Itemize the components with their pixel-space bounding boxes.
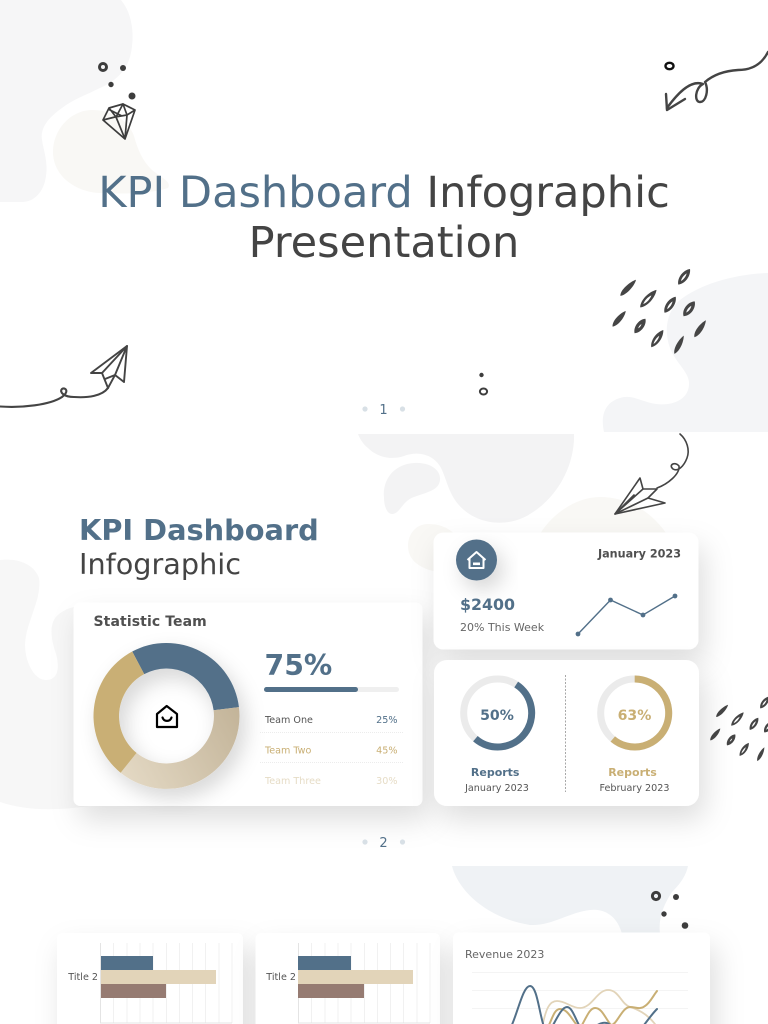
title: Presentation xyxy=(249,218,519,268)
label: February report: Reports xyxy=(608,766,657,779)
background blob: top left grey xyxy=(0,0,133,202)
line chart xyxy=(511,986,657,1024)
icon: diamond xyxy=(103,104,135,139)
icon: home in donut xyxy=(157,706,177,727)
date: January 2023 xyxy=(597,548,681,560)
divider xyxy=(564,675,566,792)
subtext: 20% This Week xyxy=(460,621,545,634)
ring chart: February: 63% xyxy=(618,708,651,724)
axis label: Title 2 xyxy=(67,972,98,983)
ring chart: January xyxy=(464,679,532,747)
icon: looping arrow top right xyxy=(666,52,768,110)
bars xyxy=(298,956,413,998)
grid xyxy=(472,972,688,1008)
grid xyxy=(100,943,232,1023)
page number 1: 1 xyxy=(379,403,388,418)
bars xyxy=(101,956,216,998)
team rows: 25% xyxy=(376,715,398,726)
icon: leaf cluster, slide 2 xyxy=(709,695,768,762)
slide 2 heading: Infographic xyxy=(79,547,241,581)
line chart xyxy=(576,594,677,636)
panel: weekly revenue xyxy=(434,532,698,650)
label: January report xyxy=(464,766,529,794)
page number 2: 2 xyxy=(379,836,388,851)
big percent: 75% xyxy=(264,649,332,682)
panel: bar chart 2 xyxy=(256,933,440,1024)
panel: statistic team xyxy=(74,602,422,806)
grid xyxy=(298,943,430,1023)
team rows: Team Two xyxy=(264,746,312,756)
slide 2 heading: KPI Dashboard xyxy=(79,513,319,547)
label: February report: February 2023 xyxy=(600,783,669,794)
background blob: slide 3 xyxy=(452,866,688,934)
panel: revenue line chart xyxy=(453,932,710,1024)
icon: paper plane with trail, slide 1 xyxy=(0,346,127,407)
background blob: slide 2 left xyxy=(0,560,90,809)
title: KPI Dashboard Infographic xyxy=(98,168,670,218)
team rows: 45% xyxy=(376,746,398,756)
panel: reports xyxy=(434,660,699,806)
label: January report: Reports xyxy=(471,766,520,779)
icon: dots top left xyxy=(100,64,136,100)
progress bar xyxy=(264,687,399,692)
background blob: top left beige xyxy=(53,110,169,193)
ring chart: January: 50% xyxy=(480,708,514,724)
amount: $2400 xyxy=(460,595,515,614)
label: January report: January 2023 xyxy=(464,783,529,794)
team rows: Team One xyxy=(264,715,313,726)
icon: small dots, slide 1 xyxy=(479,373,487,394)
background blob: bottom right of slide 1 xyxy=(603,273,768,432)
icon: home badge xyxy=(456,540,497,580)
team rows xyxy=(260,715,404,787)
label: February report xyxy=(600,766,669,794)
icon: dots, slide 3 xyxy=(652,892,688,929)
slide 2 heading xyxy=(79,513,319,581)
panel heading: Revenue 2023 xyxy=(465,948,544,961)
team rows: 30% xyxy=(376,776,398,787)
axis label: Title 2 xyxy=(265,972,296,983)
background blobs: slide 2 top xyxy=(358,434,668,572)
ring chart: February xyxy=(601,679,669,747)
panel heading: Statistic Team xyxy=(94,614,207,630)
donut chart xyxy=(94,643,239,789)
page number 2 xyxy=(362,836,405,851)
team rows: Team Three xyxy=(264,776,321,787)
panel: bar chart 1 xyxy=(57,933,243,1024)
icon: leaf cluster xyxy=(610,267,708,355)
page number 1 xyxy=(362,403,405,418)
icon: paper plane with trail, slide 2 xyxy=(615,434,688,514)
title xyxy=(98,168,670,268)
